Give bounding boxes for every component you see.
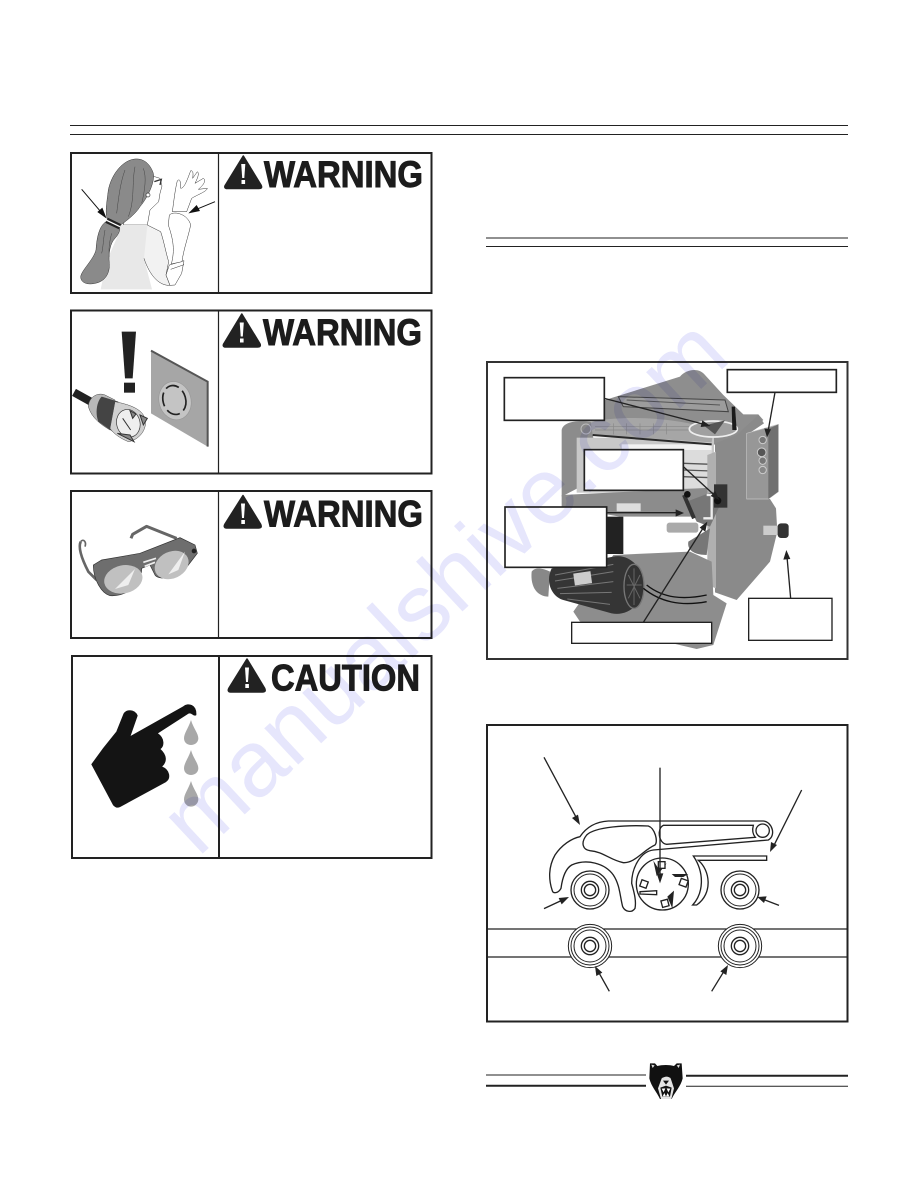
chip breaker and pressure bar	[550, 821, 773, 911]
panel: warning plug and receptacle	[71, 310, 432, 474]
opening behind table	[577, 438, 714, 493]
icon: safety glasses	[80, 526, 197, 597]
warning sign word: WARNING	[264, 492, 423, 534]
right knob	[763, 526, 780, 535]
height handwheel	[689, 421, 737, 437]
right side casting	[715, 415, 777, 600]
callout arrows	[604, 392, 791, 622]
callout box	[584, 450, 683, 490]
callout box	[505, 507, 607, 567]
icon: woman with tied back hair and rolled sleeves	[81, 159, 215, 289]
section rule	[486, 238, 848, 246]
warning sign word: WARNING	[263, 311, 422, 353]
callout box	[504, 378, 604, 420]
callout box	[727, 370, 836, 392]
caution sign word	[228, 656, 420, 698]
diagram arrows	[544, 757, 802, 991]
panel: caution hand with drops	[72, 656, 432, 858]
cutterhead with knives	[636, 858, 688, 910]
left upright	[562, 421, 593, 497]
motor	[531, 569, 550, 597]
callout box	[749, 598, 832, 640]
header rule	[70, 126, 848, 134]
feed roller and rails	[591, 418, 713, 442]
rear hood	[590, 370, 763, 445]
panel: planer identification photo	[487, 362, 848, 659]
warning sign word: WARNING	[264, 153, 423, 195]
table lines	[487, 929, 847, 957]
icon: plug, receptacle and exclamation mark	[74, 332, 208, 447]
panel: warning tie back hair	[71, 153, 432, 293]
control box	[747, 424, 778, 499]
footer rule with bear logo	[486, 1063, 848, 1099]
under-bar opening, base and leg	[607, 517, 693, 557]
rollers	[568, 871, 762, 968]
front head bar	[562, 488, 713, 518]
machine photograph	[504, 370, 836, 649]
callout box	[572, 622, 712, 643]
panel: warning safety glasses	[71, 491, 432, 638]
watermark: manualshive.com	[140, 297, 746, 873]
icon: hand with dripping fingertip	[92, 705, 198, 807]
panel: roller and cutterhead diagram	[487, 725, 848, 1022]
icon: bear head logo	[649, 1063, 683, 1099]
caution sign word: CAUTION	[271, 656, 420, 698]
